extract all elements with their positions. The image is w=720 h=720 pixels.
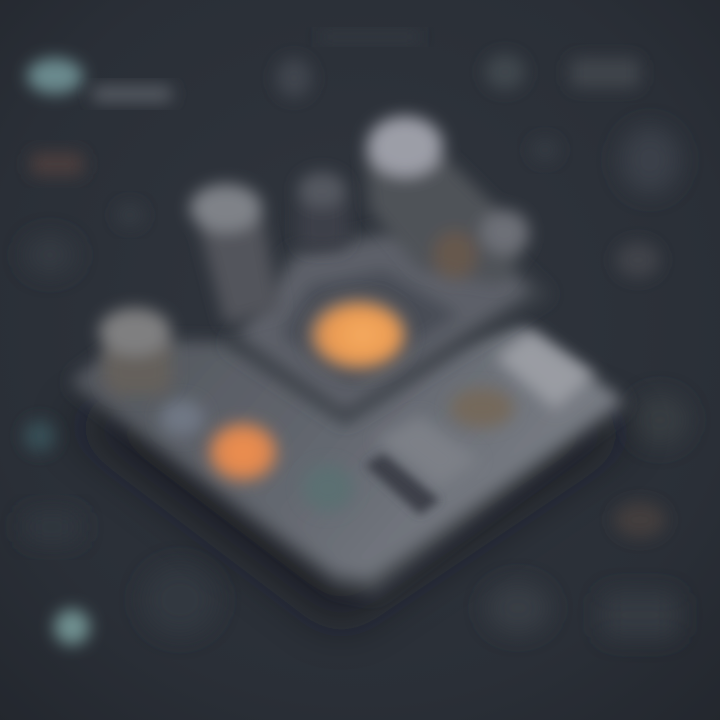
icon: top centre mark [276,58,312,98]
icon: right brown mark [614,502,666,538]
platform: lower tray shadow [70,340,630,625]
icon: top-left teal badge [27,58,83,94]
tray slot: dark bar [365,452,440,515]
icon: left column mark [24,235,76,275]
tray tile: teal block [302,464,354,512]
icon: bottom centre right mark [486,582,550,634]
background icons: faint scattered marks [24,32,688,645]
orange disc: upper [306,295,410,375]
column: back middle [298,172,348,250]
column: back left [190,184,280,325]
platform: lower tray [70,325,628,596]
icon: bottom centre left mark [142,564,218,636]
icon: left teal mark [24,420,56,452]
icon: lower-left mark [24,512,80,542]
icon: right column upper [620,126,680,194]
icon: right column lower [632,394,688,446]
icon: bottom-left teal circle [54,609,90,645]
icon: top far right mark [570,58,640,88]
icon: right column middle [616,242,660,278]
cylinder: left on tray [99,308,172,395]
platform: upper dial base [225,215,552,425]
tray block: light box [495,330,595,410]
icon: bottom right mark [602,592,678,638]
tray tile: brown block [450,388,514,428]
icon: top right mark [485,54,525,90]
heading bar: top-left [92,86,172,102]
column: tall top [365,116,530,285]
tray tile: blue-grey square [160,400,204,436]
icon: small mark right of centre [531,138,559,162]
icon: red-brown label [30,152,84,176]
text bar: top centre [320,32,420,42]
tray tile: light bar [375,415,480,488]
orange disc: lower [209,423,277,481]
tray details [160,330,595,515]
icon: left small mark [116,203,144,227]
